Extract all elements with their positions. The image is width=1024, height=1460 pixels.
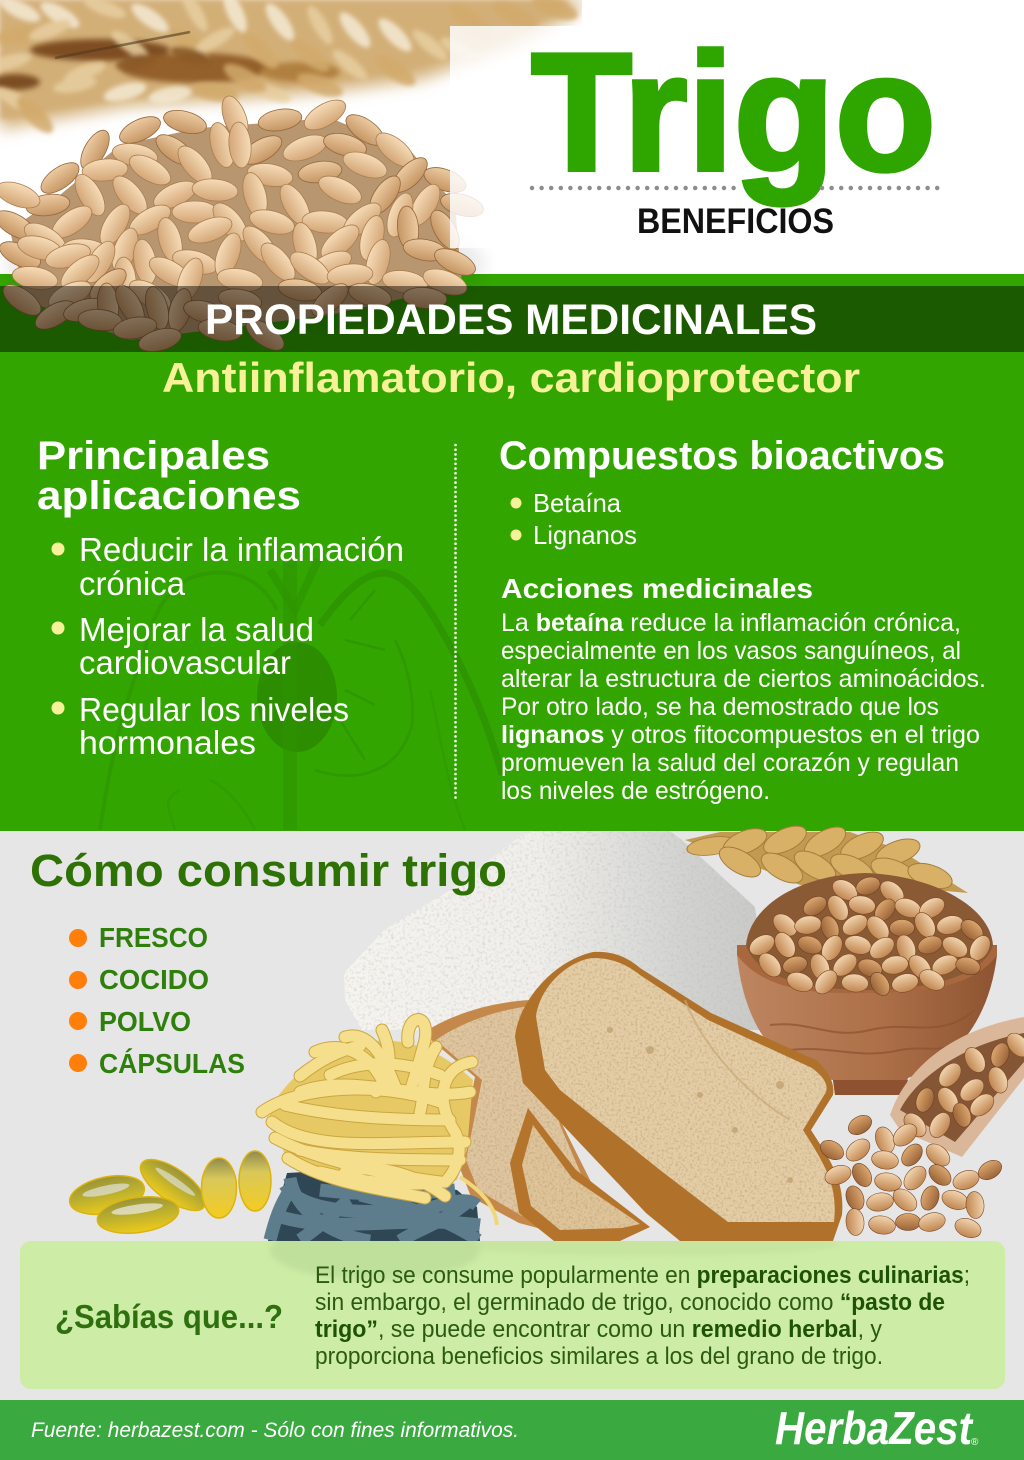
- photo: spilled wheat berries: [817, 1111, 1005, 1241]
- source note: Fuente: herbazest.com - Sólo con fines informativos.: [31, 1419, 519, 1442]
- green band behind the photo: [0, 274, 1024, 831]
- list: consumption forms: FRESCO: [99, 922, 208, 953]
- translucent white panel over the photo: [450, 26, 1024, 248]
- text: medicinal actions: los niveles de estrógeno.: [501, 777, 770, 805]
- subtitle: Beneficios: BENEFICIOS: [637, 202, 834, 241]
- text: medicinal actions: especialmente en los vasos sanguíneos, al: [501, 637, 961, 665]
- heading: Acciones medicinales: Acciones medicinales: [501, 573, 813, 604]
- heading: Principales aplicaciones: [37, 434, 301, 518]
- text: medicinal actions: [501, 609, 986, 805]
- text: medicinal actions: promueven la salud del corazón y regulan: [501, 749, 959, 777]
- list: compounds: Lignanos: [533, 520, 637, 550]
- footer bar: [0, 1400, 1024, 1460]
- panel: principal applications: [37, 434, 404, 761]
- text: medicinal actions: La betaína reduce la inflamación crónica,: [501, 609, 961, 637]
- list: applications: [52, 531, 404, 761]
- subheading: properties: Antiinflamatorio, cardioprotector: [162, 354, 860, 401]
- consumption section background: [0, 831, 1024, 1400]
- photo: tagliatelle nest, blue-grey: [268, 1170, 480, 1241]
- heading: Compuestos bioactivos: Compuestos bioactivos: [499, 434, 945, 478]
- callout text: El trigo se consume popularmente en preparaciones culinarias;: [315, 1262, 970, 1289]
- heading: Principales aplicaciones: Principales: [37, 434, 270, 478]
- list: compounds: [510, 488, 637, 550]
- text: medicinal actions: lignanos y otros fitocompuestos en el trigo: [501, 721, 980, 749]
- callout heading: ¿Sabías que...?: [55, 1298, 283, 1335]
- logo: HerbaZest: ®: [971, 1437, 979, 1448]
- photo: wheat ear: [685, 820, 968, 894]
- list: applications: crónica: [79, 565, 186, 602]
- list: consumption forms: POLVO: [99, 1006, 191, 1037]
- photo: tagliatelle nest, yellow: [262, 1020, 497, 1225]
- photo: back bread slice: [423, 1000, 600, 1230]
- text: medicinal actions: Por otro lado, se ha demostrado que los: [501, 693, 939, 721]
- photo: wooden bowl of wheat berries: [737, 873, 997, 1095]
- watermark: human circulatory figure: [100, 560, 502, 830]
- section header bar: [0, 286, 1024, 352]
- photo: flour mound: [344, 831, 770, 1030]
- photo: blurred wheat ears: [0, 0, 585, 138]
- logo: HerbaZest: HerbaZest: [775, 1402, 973, 1454]
- photo: main bread slice: [515, 952, 842, 1241]
- list: applications: cardiovascular: [79, 644, 291, 681]
- panel: bioactive compounds: [499, 434, 986, 805]
- photo: lower bread slice: [510, 1108, 650, 1241]
- callout text: sin embargo, el germinado de trigo, conocido como “pasto de: [315, 1289, 945, 1316]
- photo: softgel capsules: [66, 1150, 271, 1238]
- photo: pile of oat grains: [0, 93, 486, 356]
- list: consumption forms: CÁPSULAS: [99, 1048, 245, 1079]
- heading: Principales aplicaciones: aplicaciones: [37, 474, 301, 518]
- list: compounds: Betaína: [533, 488, 622, 518]
- list: applications: Mejorar la salud: [79, 611, 314, 648]
- text: medicinal actions: alterar la estructura de ciertos aminoácidos.: [501, 665, 986, 693]
- callout text: trigo”, se puede encontrar como un remedio herbal, y: [315, 1316, 882, 1343]
- list: applications: hormonales: [79, 724, 256, 761]
- callout text: proporciona beneficios similares a los del grano de trigo.: [315, 1343, 883, 1370]
- list: consumption forms: COCIDO: [99, 964, 209, 995]
- photo: wooden scoop with wheat berries: [890, 1017, 1024, 1157]
- title: Trigo: Trigo: [531, 18, 936, 206]
- callout: did you know: [20, 1241, 1005, 1389]
- callout text: [315, 1262, 970, 1370]
- heading: how to consume: Cómo consumir trigo: [30, 845, 507, 896]
- list: applications: Reducir la inflamación: [79, 531, 404, 568]
- heading: Propiedades medicinales: PROPIEDADES MEDICINALES: [205, 296, 817, 344]
- dotted rule under title: [532, 186, 938, 190]
- list: consumption forms: [69, 922, 245, 1079]
- list: applications: Regular los niveles: [79, 691, 349, 728]
